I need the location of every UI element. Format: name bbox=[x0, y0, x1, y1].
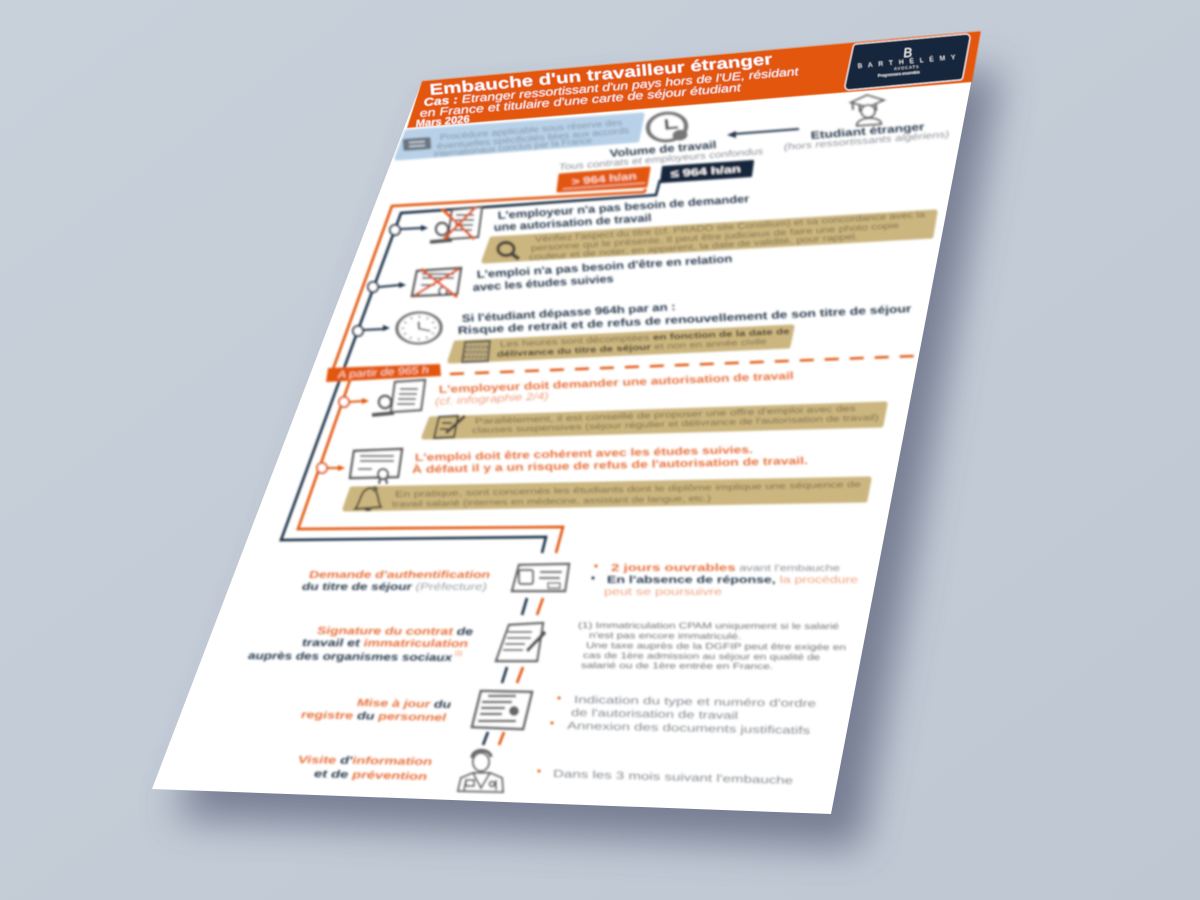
arrow: student to volume bbox=[727, 129, 799, 138]
icon: staff register bbox=[472, 691, 532, 729]
flow line: orange bbox=[298, 189, 646, 553]
connector dashes 3 bbox=[483, 732, 504, 745]
work volume label bbox=[558, 139, 764, 172]
step 3 details: Annexion des documents justificatifs bbox=[567, 720, 810, 737]
logo bbox=[849, 38, 966, 86]
step 2 footnote: salarié ou de 1ère entrée en France. bbox=[581, 660, 773, 671]
page shadow bbox=[175, 70, 1000, 848]
flow line: dark bbox=[281, 180, 660, 553]
callout: check the permit bbox=[484, 209, 935, 262]
step 2 footnote: Une taxe auprès de la DGFIP peut être exigée en bbox=[586, 640, 846, 652]
step 3 label bbox=[301, 697, 452, 724]
heading: coherent with studies bbox=[412, 444, 808, 476]
heading: job unrelated to studies bbox=[472, 253, 733, 294]
step 1 details: 2 jours ouvrables avant l'embauche bbox=[611, 562, 840, 574]
callout: hours counting: délivrance du titre de séjour et non en année civile bbox=[497, 336, 767, 359]
panel: international agreements: Procédure applicable sous réserve des bbox=[439, 117, 623, 142]
work volume label: Volume de travail bbox=[609, 139, 717, 160]
student label: (hors ressortissants algériens) bbox=[783, 129, 950, 152]
heading: permit required bbox=[435, 370, 794, 408]
icon: wall clock bbox=[396, 311, 442, 345]
button: up to 964 h bbox=[661, 161, 753, 182]
callout: job offer clauses: Parallèlement, il est conseillé de proposer une offre d'emploi avec des bbox=[475, 403, 856, 426]
threshold tag bbox=[326, 364, 441, 382]
heading: no work permit needed: L'employeur n'a pas besoin de demander bbox=[497, 193, 750, 222]
panel: international agreements: éventuelles spécificités liées aux accords bbox=[436, 125, 630, 151]
step 2 footnote: cas de 1ère admission au séjour en qualité de bbox=[583, 650, 820, 662]
panel: international agreements: internationaux conclus par la France bbox=[433, 135, 593, 159]
callout: hours counting bbox=[450, 326, 792, 362]
step 2 label: (1) bbox=[455, 651, 462, 657]
document page bbox=[152, 31, 981, 814]
icon: stamp and form bbox=[372, 380, 425, 415]
logo: AVOCATS bbox=[894, 64, 920, 71]
step 4 detail: Dans les 3 mois suivant l'embauche bbox=[553, 768, 793, 787]
step 3 details: Indication du type et numéro d'ordre bbox=[574, 694, 816, 710]
logo: BARTHÉLÉMY bbox=[857, 52, 956, 70]
step 1 label: du titre de séjour (Préfecture) bbox=[302, 581, 487, 593]
step 2 footnote: n'est pas encore immatriculé. bbox=[589, 630, 741, 641]
callout: concerned students bbox=[345, 479, 869, 510]
step 4 label: Visite d' information bbox=[298, 754, 432, 768]
icon: magnifier bbox=[498, 242, 519, 259]
heading: job unrelated to studies: L'emploi n'a pas besoin d'être en relation bbox=[476, 253, 733, 281]
step 3 details bbox=[550, 694, 816, 737]
icon: student bbox=[851, 94, 885, 126]
step 2 footnote bbox=[578, 620, 846, 671]
callout: concerned students: En pratique, sont concernés les étudiants dont le diplôme implique une séquence de bbox=[395, 479, 861, 499]
student label bbox=[783, 121, 950, 152]
icon: clock bbox=[647, 111, 688, 144]
step 1 label: Demande d'authentification bbox=[309, 569, 490, 581]
step 3 label: Mise à jour du bbox=[357, 697, 452, 711]
heading: risk over 964h: Si l'étudiant dépasse 964h par an : bbox=[461, 301, 676, 325]
button: over 964 h: > 964 h/an bbox=[571, 171, 637, 188]
work volume label: Tous contrats et employeurs confondus bbox=[558, 146, 764, 172]
step 4 label: et de prévention bbox=[314, 768, 427, 783]
node and arrow 1 bbox=[390, 225, 428, 235]
icon: crossed diploma bbox=[412, 268, 461, 297]
student label: Etudiant étranger bbox=[810, 121, 925, 142]
step 1 label bbox=[302, 569, 490, 593]
icon: doctor bbox=[458, 750, 503, 792]
callout: job offer clauses bbox=[424, 403, 885, 438]
heading: coherent with studies: L'emploi doit être cohérent avec les études suivies. bbox=[415, 444, 753, 464]
step 1 details: En l'absence de réponse, la procédure bbox=[607, 574, 858, 586]
heading: no work permit needed bbox=[493, 193, 750, 234]
heading: risk over 964h bbox=[458, 301, 912, 337]
threshold tag: A partir de 965 h bbox=[336, 365, 430, 381]
step 3 details: de l'autorisation de travail bbox=[571, 707, 738, 722]
connector dashes 1 bbox=[522, 598, 543, 615]
panel: international agreements bbox=[397, 115, 642, 159]
heading: permit required: L'employeur doit demander une autorisation de travail bbox=[439, 370, 794, 396]
callout: concerned students: travail salarié (internes en médecine, assistant de langue, etc.) bbox=[392, 493, 711, 509]
node and arrow 3 bbox=[353, 325, 390, 336]
icon: bell bbox=[355, 486, 381, 510]
node and arrow 4 bbox=[339, 397, 369, 407]
step 1 details: peut se poursuivre bbox=[604, 586, 722, 598]
icon: ID card bbox=[512, 564, 569, 591]
heading: risk over 964h: Risque de retrait et de refus de renouvellement de son titre de séjour bbox=[458, 303, 912, 337]
step 4 label bbox=[298, 754, 432, 783]
heading: no work permit needed: une autorisation de travail bbox=[493, 212, 652, 234]
heading: coherent with studies: À défaut il y a un risque de refus de l'autorisation de travail. bbox=[412, 454, 808, 476]
step 2 footnote: (1) Immatriculation CPAM uniquement si le salarié bbox=[578, 620, 839, 631]
button: up to 964 h: ≤ 964 h/an bbox=[670, 164, 741, 180]
callout: check the permit: couleur et de noter, en apparent, la date de validité, pour rappel. bbox=[528, 231, 858, 262]
icon: diploma bbox=[350, 449, 402, 484]
icon: document and pen bbox=[434, 416, 465, 438]
case description: Cas : Etranger ressortissant d'un pays hors de l'UE, résidant bbox=[423, 66, 800, 109]
icon: signed document bbox=[496, 623, 545, 661]
step 2 label bbox=[248, 625, 473, 664]
date: Mars 2026 bbox=[415, 114, 471, 130]
callout: check the permit: Vérifiez l'aspect du titre (cf. PRADO site Consilium) et sa concordance avec la bbox=[534, 209, 926, 244]
title: Embauche d'un travailleur étranger bbox=[429, 51, 773, 99]
logo: B bbox=[903, 45, 913, 60]
heading: permit required: (cf. infographie 2/4) bbox=[435, 391, 549, 408]
heading: job unrelated to studies: avec les études suivies bbox=[472, 273, 614, 294]
case description bbox=[419, 66, 800, 120]
node and arrow 5 bbox=[317, 463, 345, 473]
callout: job offer clauses: clauses suspensives (séjour régulier et délivrance de l'autorisation de travail) bbox=[472, 412, 879, 435]
node and arrow 2 bbox=[368, 282, 406, 292]
step 2 label: Signature du contrat de bbox=[317, 625, 473, 638]
callout: hours counting: Les heures sont décomptées en fonction de la date de bbox=[500, 326, 790, 349]
step 4 detail bbox=[538, 768, 793, 787]
icon: calendar bbox=[462, 341, 490, 362]
callout: check the permit: personne qui le présente. Il peut être judicieux de faire une photo copie bbox=[531, 220, 900, 253]
step 1 details bbox=[592, 562, 858, 598]
button: over 964 h bbox=[558, 168, 649, 191]
step 3 label: registre du personnel bbox=[301, 709, 448, 724]
step 2 label: travail et immatriculation bbox=[302, 637, 468, 650]
connector dashes 2 bbox=[502, 667, 523, 683]
step 2 label: auprès des organismes sociaux bbox=[248, 650, 454, 664]
case description: en France et titulaire d'une carte de séjour étudiant bbox=[419, 82, 742, 120]
icon: handshake bbox=[403, 137, 431, 151]
header band bbox=[407, 31, 981, 130]
icon: crossed stamp and form bbox=[430, 207, 482, 242]
logo: Progressons ensemble bbox=[878, 69, 921, 78]
